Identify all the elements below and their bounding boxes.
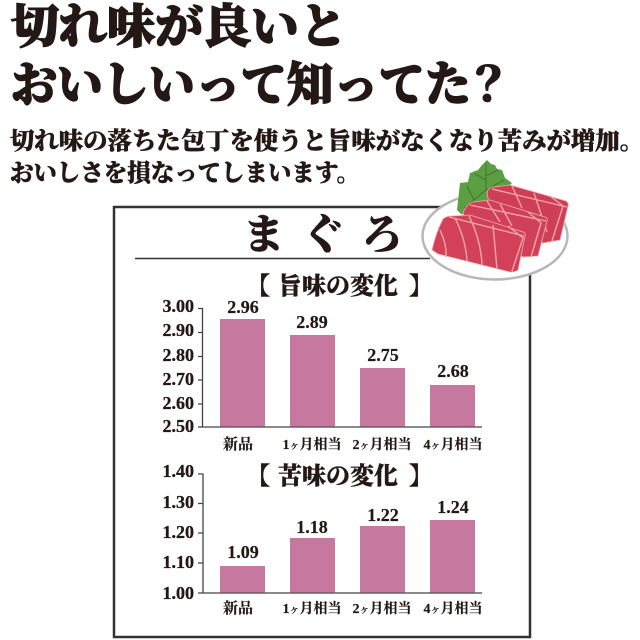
y axis labels: 1.30 bbox=[162, 492, 194, 512]
title bbox=[11, 0, 512, 115]
category labels bbox=[223, 433, 482, 454]
value labels: 2.75 bbox=[367, 345, 399, 365]
bar chart: bitterness change bbox=[162, 461, 482, 618]
y axis labels: 2.80 bbox=[162, 345, 194, 365]
value labels bbox=[227, 497, 469, 562]
intro text: おいしさを損なってしまいます。 bbox=[10, 153, 360, 188]
category labels: 2ヶ月相当 bbox=[352, 598, 412, 618]
bars bbox=[220, 520, 475, 592]
tuna slice back bbox=[487, 185, 568, 243]
category labels bbox=[223, 597, 482, 618]
y axis labels: 2.60 bbox=[162, 393, 194, 413]
y axis labels: 1.00 bbox=[162, 583, 194, 603]
chart heading: umami: 旨味の変化 bbox=[278, 266, 398, 301]
chart heading: bitterness: 苦味の変化 bbox=[278, 456, 398, 491]
panel heading: maguro: まぐろ bbox=[243, 202, 403, 262]
value labels: 1.24 bbox=[437, 497, 469, 517]
plate bbox=[422, 192, 568, 280]
shiso leaf bbox=[457, 160, 512, 216]
category labels: 1ヶ月相当 bbox=[282, 598, 342, 618]
axes bbox=[198, 308, 482, 427]
y axis labels bbox=[162, 461, 194, 603]
chart heading: umami: 】 bbox=[409, 266, 433, 301]
panel: tuna charts frame bbox=[114, 207, 530, 637]
category labels: 新品 bbox=[223, 597, 253, 618]
value labels: 1.18 bbox=[296, 517, 328, 537]
chart heading: umami: 【 bbox=[246, 266, 270, 301]
category labels: 1ヶ月相当 bbox=[282, 434, 342, 454]
intro text bbox=[10, 121, 640, 188]
category labels: 新品 bbox=[223, 433, 253, 454]
category labels: 4ヶ月相当 bbox=[424, 598, 482, 618]
tuna slice middle bbox=[463, 200, 547, 257]
y axis labels: 2.50 bbox=[162, 416, 194, 436]
chart heading: bitterness: 】 bbox=[409, 456, 433, 491]
y axis labels: 3.00 bbox=[162, 296, 194, 316]
y axis labels: 1.20 bbox=[162, 522, 194, 542]
intro text: 切れ味の落ちた包丁を使うと旨味がなくなり苦みが増加。 bbox=[10, 121, 640, 156]
y axis labels: 1.40 bbox=[162, 461, 194, 481]
bar chart: umami change bbox=[162, 296, 482, 454]
value labels: 1.09 bbox=[227, 542, 259, 562]
chart heading: bitterness: 【 bbox=[246, 456, 270, 491]
category labels: 4ヶ月相当 bbox=[424, 434, 482, 454]
y axis labels: 2.90 bbox=[162, 320, 194, 340]
value labels: 2.96 bbox=[227, 297, 259, 317]
value labels: 2.68 bbox=[437, 361, 469, 381]
axes bbox=[198, 474, 482, 593]
y axis labels: 2.70 bbox=[162, 369, 194, 389]
icon: tuna sashimi on plate with shiso leaf bbox=[422, 160, 568, 280]
category labels: 2ヶ月相当 bbox=[352, 434, 412, 454]
value labels: 1.22 bbox=[367, 505, 399, 525]
tuna slice front bbox=[432, 215, 525, 272]
bars bbox=[220, 319, 475, 426]
y axis labels: 1.10 bbox=[162, 552, 194, 572]
value labels bbox=[227, 297, 469, 381]
y axis labels bbox=[162, 296, 194, 436]
title: おいしいって知ってた bbox=[11, 48, 471, 115]
title: ？ bbox=[465, 48, 512, 115]
value labels: 2.89 bbox=[296, 312, 328, 332]
